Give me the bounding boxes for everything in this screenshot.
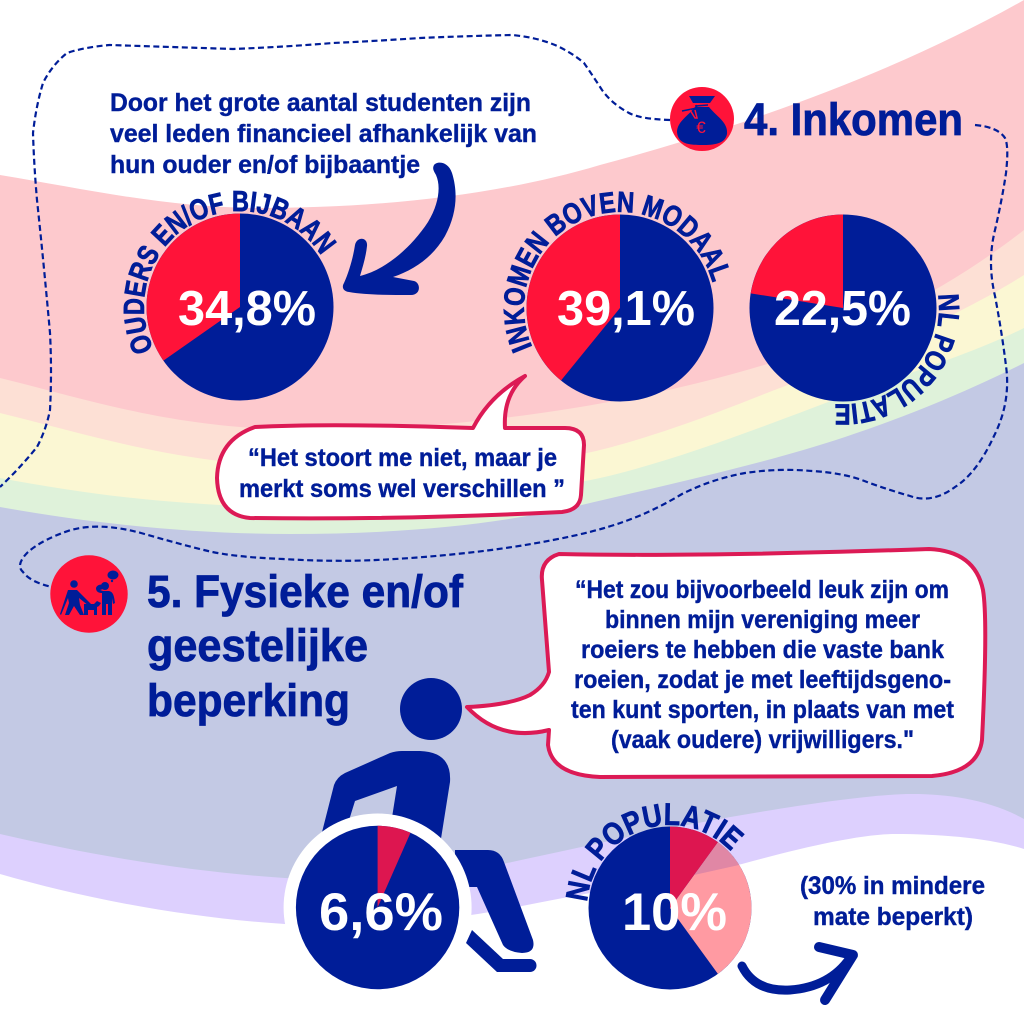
pie: NL populatie 10%: 10% (622, 883, 727, 942)
speech bubble: verschillen (217, 376, 584, 518)
intro text (110, 89, 537, 179)
pie: inkomen boven modaal 39,1%: INKOMEN BOVEN MODAAL (503, 191, 729, 354)
pie: NL populatie 10%: NL POPULATIE (566, 803, 745, 901)
pie: NL populatie 22,5% (750, 214, 960, 425)
intro text: veel leden financieel afhankelijk van (110, 120, 537, 148)
heading: 5. Fysieke en/of geestelijke beperking: beperking (147, 675, 350, 726)
heading: 5. Fysieke en/of geestelijke beperking: geestelijke (147, 620, 368, 671)
pie: ouders en/of bijbaan 34,8%: 34,8% (178, 282, 316, 336)
heading: 4. Inkomen: 4. Inkomen (744, 94, 963, 145)
speech bubble: roeiers (467, 549, 985, 777)
speech bubble: roeiers: ten kunt sporten, in plaats van met (571, 696, 955, 724)
pie: NL populatie 10% (566, 803, 752, 990)
pie: 6,6% (284, 814, 472, 1002)
heading: 5. Fysieke en/of geestelijke beperking: 5. Fysieke en/of (147, 566, 464, 617)
speech bubble: roeiers: roeien, zodat je met leeftijdsgeno- (574, 666, 951, 694)
icon: money bag: € (696, 118, 706, 137)
speech bubble: verschillen: merkt soms wel verschillen ” (239, 475, 565, 503)
speech bubble: roeiers: (vaak oudere) vrijwilligers." (611, 726, 914, 754)
pie: ouders en/of bijbaan 34,8%: OUDERS EN/OF BIJBAAN (124, 190, 337, 354)
pie: NL populatie 22,5%: 22,5% (774, 282, 911, 336)
dashed path: right and lower route (20, 125, 1007, 587)
note: 30% in mindere mate beperkt: (30% in mindere (800, 872, 985, 900)
intro text: Door het grote aantal studenten zijn (110, 89, 531, 117)
section 5: beperking (50, 547, 988, 1005)
speech bubble: verschillen: “Het stoort me niet, maar je (248, 444, 557, 472)
speech bubble: roeiers: “Het zou bijvoorbeeld leuk zijn om (575, 576, 949, 604)
dashed path: top route (0, 35, 670, 487)
heading: 5. Fysieke en/of geestelijke beperking (147, 566, 464, 726)
arrow: curved to first pie (343, 163, 456, 295)
icon: wheelchair user (320, 678, 537, 972)
section 4: inkomen (110, 87, 963, 520)
icon: money bag (670, 87, 734, 151)
pie: 6,6%: 6,6% (319, 883, 443, 942)
icon: people with disabilities (50, 555, 128, 633)
arrow: curved to note (742, 947, 853, 1000)
note: 30% in mindere mate beperkt: mate beperkt) (813, 903, 973, 931)
pie: inkomen boven modaal 39,1%: 39,1% (557, 282, 695, 336)
speech bubble: roeiers: roeiers te hebben die vaste bank (581, 636, 944, 664)
intro text: hun ouder en/of bijbaantje (110, 151, 420, 179)
note: 30% in mindere mate beperkt (800, 872, 985, 931)
pie: NL populatie 22,5%: NL POPULATIE (835, 294, 960, 425)
speech bubble: roeiers: binnen mijn vereniging meer (605, 606, 920, 634)
